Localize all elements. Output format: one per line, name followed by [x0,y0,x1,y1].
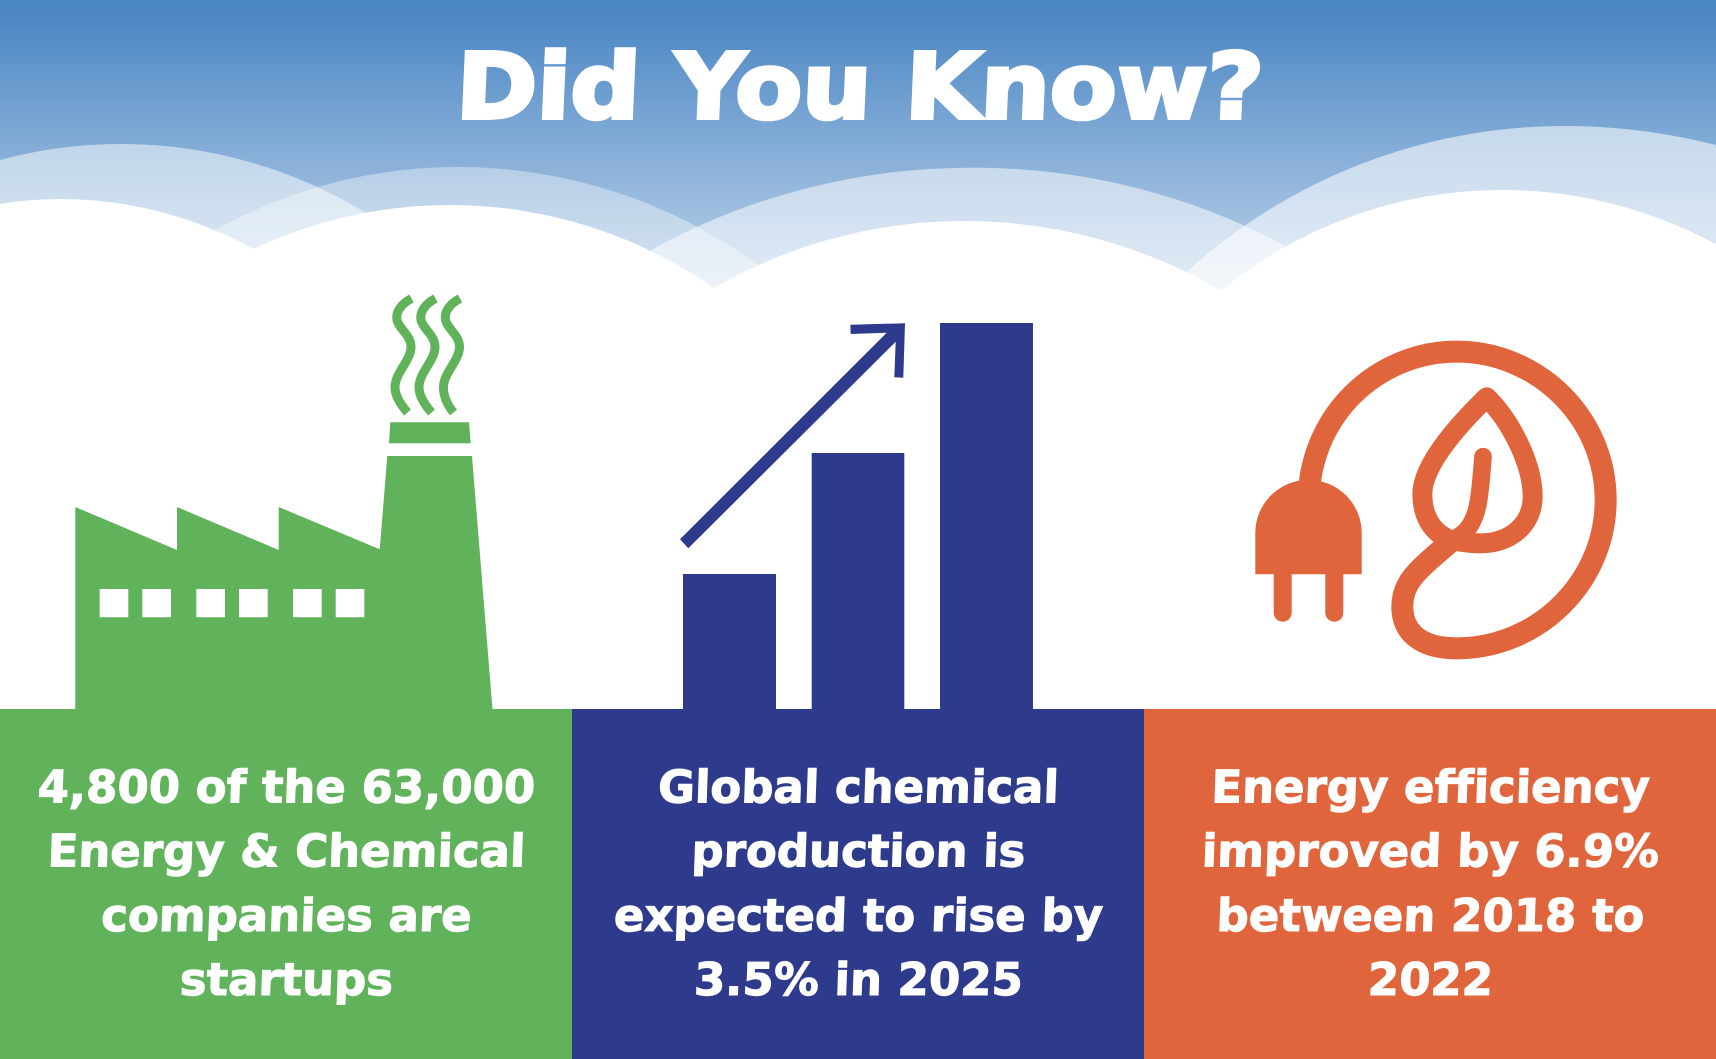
factory building and chimney [75,456,493,712]
text: startups fact: Energy & Chemical [47,825,526,877]
bar 1 [683,574,776,712]
sky background [0,0,1716,720]
text: startups fact: companies are [100,889,473,942]
panel: orange efficiency fact [1144,709,1716,1059]
panel: green startups fact [0,709,572,1059]
icon: plug with leaf cord [1255,352,1606,648]
text: startups fact: startups [179,953,394,1006]
chimney cap [389,422,471,443]
text: startups fact [37,761,536,1006]
text: production fact: expected to rise by [613,889,1104,942]
bar 3 [940,323,1033,712]
text: startups fact: 4,800 of the 63,000 [37,761,536,813]
smoke plumes [395,298,460,412]
text: production fact: Global chemical [657,761,1060,813]
text: efficiency fact: between 2018 to [1216,889,1645,942]
cord [1309,352,1606,648]
bar 2 [812,453,904,712]
text: production fact: 3.5% in 2025 [693,953,1024,1006]
translucent back clouds [0,126,1716,320]
leaf stem [1447,457,1483,543]
icon: factory [75,298,493,712]
white foreground clouds [0,190,1716,720]
text: efficiency fact [1201,761,1660,1006]
panel: blue production fact [572,709,1144,1059]
text: efficiency fact: 2022 [1367,953,1494,1006]
title: Did You Know? [454,35,1266,140]
plug body [1255,480,1362,622]
leaf outline [1422,397,1533,543]
text: efficiency fact: Energy efficiency [1210,761,1651,813]
icon: bar chart with rising arrow [680,323,1033,712]
rising arrow [680,323,905,548]
text: production fact [613,761,1104,1006]
text: efficiency fact: improved by 6.9% [1201,825,1660,877]
text: production fact: production is [691,825,1026,877]
